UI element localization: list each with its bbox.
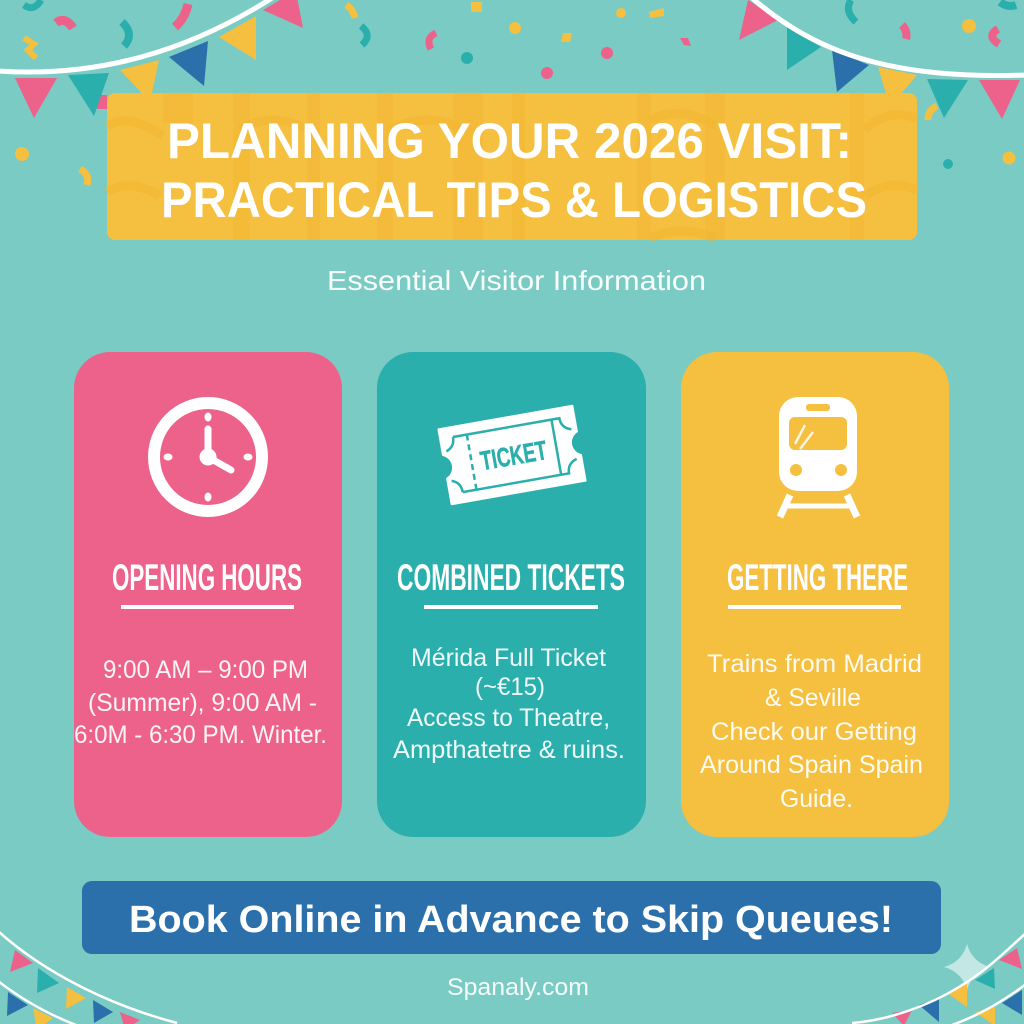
body text: opening hours: 9:00 AM – 9:00 PM: [103, 656, 308, 684]
body text: combined tickets: (~€15): [475, 673, 545, 701]
body text: opening hours: [74, 656, 327, 749]
panel: combined tickets: [377, 352, 646, 837]
heading: getting there: GETTING THERE: [727, 557, 908, 598]
sparkle: [944, 944, 990, 990]
footer website: Spanaly.com: [447, 974, 589, 1001]
call to action bar: Book Online in Advance to Skip Queues!: [129, 899, 893, 941]
body text: getting there: [700, 650, 923, 813]
heading: combined tickets: COMBINED TICKETS: [397, 557, 625, 598]
bunting: bottom right: [852, 933, 1024, 1024]
body text: opening hours: (Summer), 9:00 AM -: [88, 689, 317, 717]
icon: clock: [154, 403, 262, 511]
body text: getting there: Guide.: [780, 785, 853, 813]
title banner: [107, 93, 917, 240]
body text: combined tickets: Ampthatetre & ruins.: [393, 736, 625, 764]
body text: getting there: Around Spain Spain: [700, 751, 923, 779]
title line 1: PLANNING YOUR 2026 VISIT:: [167, 113, 852, 169]
bunting: top right: [739, 0, 1024, 119]
body text: combined tickets: [393, 644, 625, 764]
body text: combined tickets: Mérida Full Ticket: [411, 644, 606, 672]
panel: opening hours: [74, 352, 342, 837]
subtitle: Essential Visitor Information: [327, 265, 706, 296]
confetti: [15, 0, 1016, 185]
icon: ticket: TICKET: [478, 435, 550, 476]
bunting: bottom left: [0, 931, 177, 1024]
body text: combined tickets: Access to Theatre,: [407, 704, 610, 732]
panel: getting there: [681, 352, 949, 837]
bunting: top left: [0, 0, 303, 118]
title line 2: PRACTICAL TIPS & LOGISTICS: [161, 172, 867, 228]
body text: getting there: & Seville: [765, 684, 861, 712]
body text: opening hours: 6:0M - 6:30 PM. Winter.: [74, 721, 327, 749]
icon: ticket: [438, 406, 586, 504]
body text: getting there: Trains from Madrid: [707, 650, 922, 678]
call to action bar: [82, 881, 941, 954]
heading: opening hours: OPENING HOURS: [112, 557, 302, 598]
body text: getting there: Check our Getting: [711, 718, 917, 746]
icon: train: [779, 397, 857, 517]
